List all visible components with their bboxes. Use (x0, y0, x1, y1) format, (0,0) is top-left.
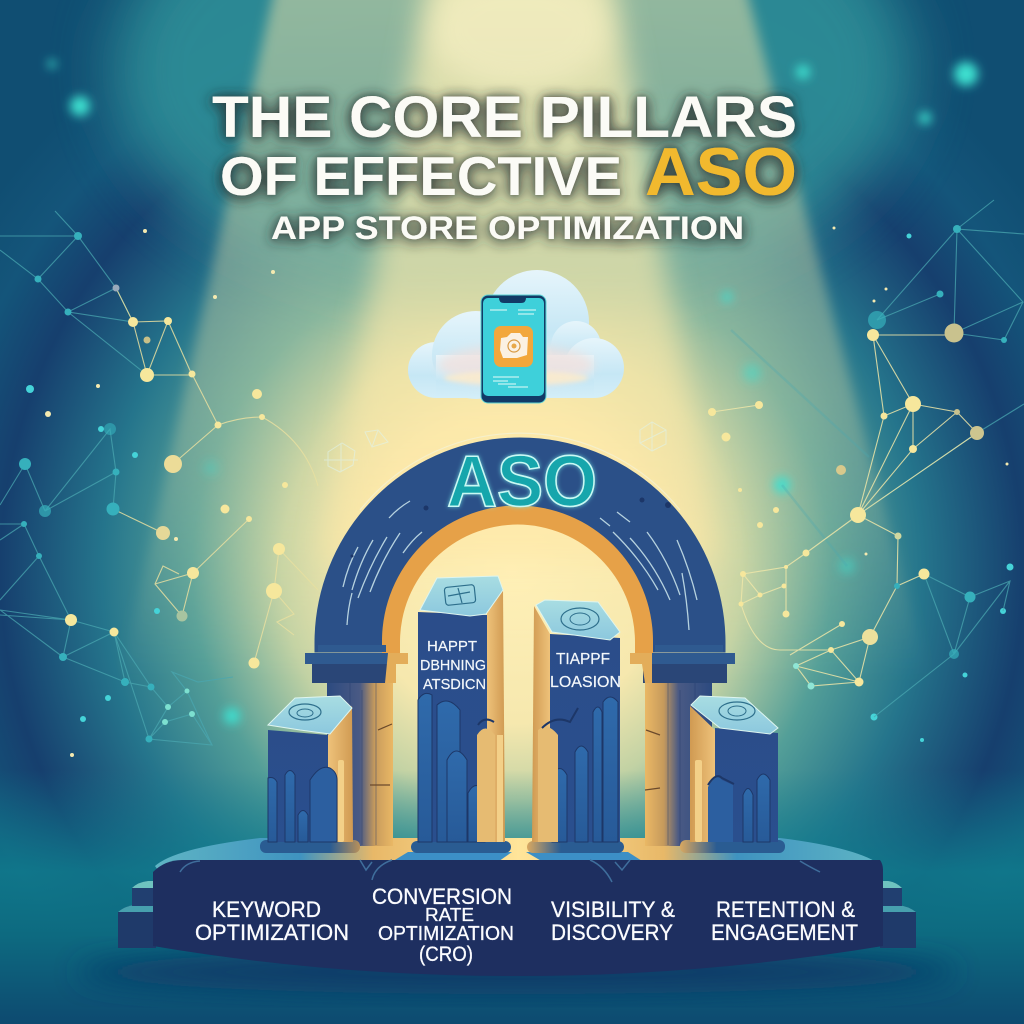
platform top surface (155, 838, 882, 880)
platform labels (195, 884, 858, 966)
arch inner orange band (382, 506, 653, 654)
label: keyword optimization: OPTIMIZATION (195, 920, 349, 945)
title block (212, 85, 797, 246)
pillar 2: conversion rate optimization (411, 576, 511, 853)
pillar 4: retention and engagement (680, 696, 785, 853)
pillar 3 engraved text (550, 651, 621, 691)
arch with columns (305, 433, 735, 846)
pillar 3 engraved text: LOASION (550, 674, 621, 691)
pillar 2 engraved text: DBHNING (420, 657, 486, 674)
right constellation network (708, 200, 1024, 717)
arch ASO neon label: ASO (447, 442, 597, 522)
platform (77, 838, 957, 994)
pillar 2 engraved text: ATSDICN (423, 676, 486, 693)
label: retention and engagement: ENGAGEMENT (711, 920, 858, 945)
label: retention and engagement (711, 897, 858, 945)
label: keyword optimization: KEYWORD (212, 897, 321, 922)
arch stone (315, 438, 725, 652)
glowing particles (26, 60, 1014, 757)
label: retention and engagement: RETENTION & (716, 897, 855, 922)
label: conversion rate optimization: CONVERSION (372, 884, 512, 909)
left constellation network (0, 211, 318, 745)
pillar 2 engraved text: HAPPT (427, 638, 477, 655)
pillar 3 engraved text: TIAPPF (556, 651, 610, 668)
label: conversion rate optimization (372, 884, 514, 966)
app icon (494, 326, 533, 367)
pillar 1: keyword optimization (260, 696, 360, 853)
small wireframe polyhedra (324, 422, 666, 472)
label: conversion rate optimization: OPTIMIZATION (378, 923, 514, 945)
icon: cloud with phone (408, 270, 624, 403)
label: visibility and discovery (551, 897, 675, 945)
label: conversion rate optimization: (CRO) (419, 943, 473, 966)
platform steps (118, 881, 916, 948)
label: visibility and discovery: DISCOVERY (551, 920, 673, 945)
title line two: OF EFFECTIVE (220, 145, 622, 207)
left column (305, 645, 408, 846)
pillar 3: visibility and discovery (527, 600, 624, 853)
title highlight ASO: ASO (645, 134, 797, 210)
pillar 2 engraved text (420, 638, 486, 693)
platform front face (153, 860, 883, 976)
label: conversion rate optimization: RATE (425, 905, 474, 925)
arch engraved lines (343, 501, 697, 630)
right column (630, 645, 735, 846)
label: keyword optimization (195, 897, 349, 945)
smartphone (481, 295, 546, 403)
label: visibility and discovery: VISIBILITY & (551, 897, 675, 922)
cloud (408, 270, 624, 399)
title line one: THE CORE PILLARS (212, 85, 797, 150)
subtitle: APP STORE OPTIMIZATION (271, 210, 744, 246)
